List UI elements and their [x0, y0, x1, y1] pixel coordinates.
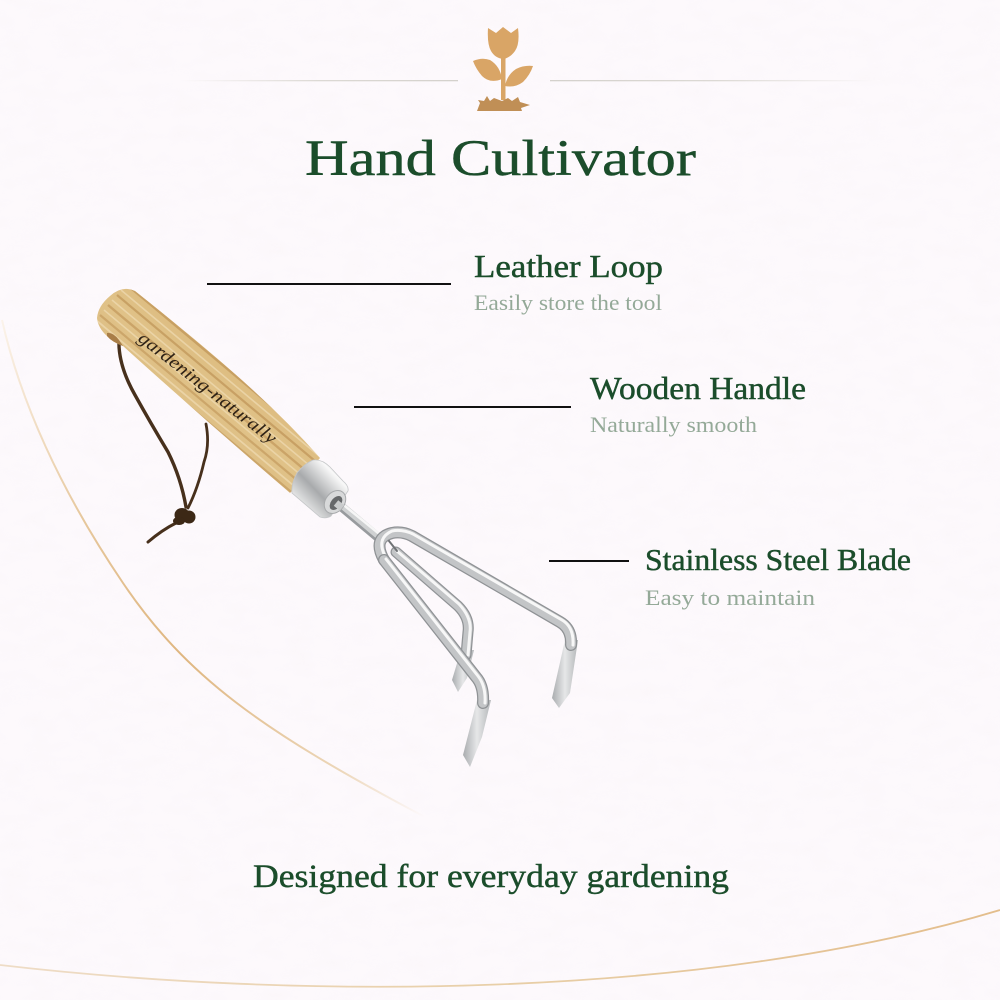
metal rod [338, 502, 383, 540]
callout line: wooden handle [354, 406, 571, 408]
illustration: hand cultivator [84, 284, 578, 767]
header divider left [180, 80, 458, 81]
callout: wooden handle: Naturally smooth [590, 412, 757, 437]
callout: stainless steel blade: Easy to maintain [645, 585, 815, 610]
outer tines [380, 530, 578, 767]
left tine [463, 700, 491, 767]
callout line: leather loop [207, 283, 451, 285]
icon: tulip [473, 27, 533, 111]
callout: leather loop: Easily store the tool [474, 290, 662, 315]
gold arc: left sweep [2, 320, 425, 817]
callout: stainless steel blade: Stainless Steel Blade [645, 542, 911, 577]
metal ferrule [292, 460, 350, 518]
callout: wooden handle: Wooden Handle [590, 370, 806, 406]
header divider right [550, 80, 880, 81]
callout: wooden handle [590, 370, 806, 437]
tagline: Designed for everyday gardening [253, 859, 729, 895]
callout: stainless steel blade [645, 542, 911, 610]
callout: leather loop: Leather Loop [474, 248, 663, 284]
callout: leather loop [474, 248, 663, 315]
leather loop [119, 340, 208, 542]
wooden handle [97, 288, 320, 493]
right tine [552, 640, 578, 708]
middle tine [396, 551, 474, 692]
callout line: stainless steel blade [549, 560, 629, 562]
leather knot [173, 508, 196, 525]
handle engraving: gardening-naturally [135, 327, 281, 448]
tulip ground [477, 96, 530, 111]
gold arc: bottom sweep [0, 910, 1000, 987]
title: Hand Cultivator [305, 131, 696, 187]
